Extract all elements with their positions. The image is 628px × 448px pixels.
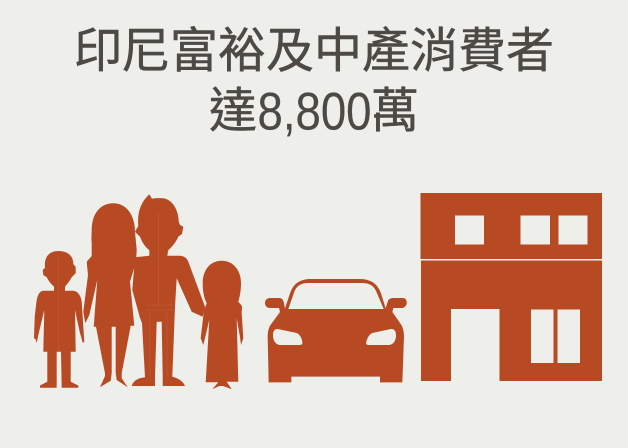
icon: small boy — [34, 251, 84, 388]
upper window middle — [520, 216, 550, 244]
upper storey — [420, 193, 602, 259]
lower storey — [421, 260, 602, 381]
car body — [265, 279, 407, 382]
upper window right — [558, 216, 588, 244]
icon: house — [420, 193, 602, 381]
icon: family of four — [34, 194, 243, 389]
right headlight — [366, 329, 396, 345]
icon: car — [265, 279, 407, 382]
title: 萬 — [371, 85, 419, 138]
title — [74, 25, 554, 142]
title: 8,800 — [258, 82, 372, 142]
figure seam lines — [58, 213, 174, 376]
title: 達 — [209, 85, 257, 138]
lower window right pane — [558, 310, 580, 363]
icon: man — [132, 194, 205, 386]
title: 印尼富裕及中產消費者 — [74, 25, 554, 78]
icon: girl — [201, 261, 243, 389]
windshield — [288, 283, 384, 309]
lower window left pane — [531, 310, 554, 363]
left headlight — [273, 329, 302, 345]
icon: woman — [83, 203, 137, 387]
upper window left — [455, 216, 484, 244]
